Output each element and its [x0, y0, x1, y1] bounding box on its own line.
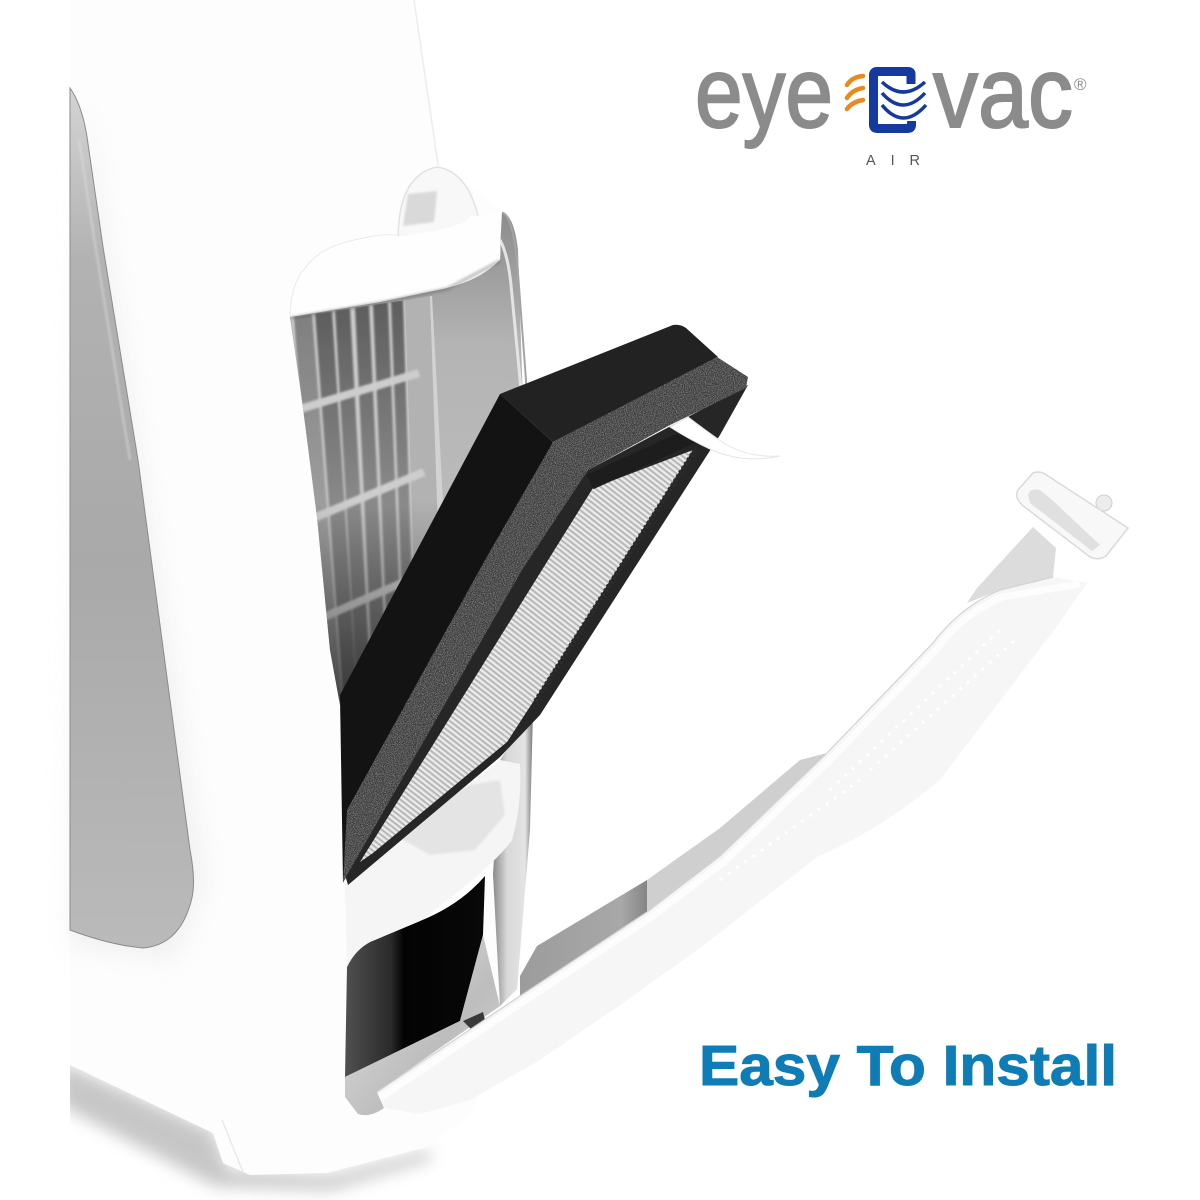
shelf under shadow [291, 261, 500, 318]
headline: Easy To Install: Easy To Install [699, 1034, 1117, 1098]
logo icon: orange air waves [847, 76, 863, 109]
pleated media [360, 450, 693, 862]
white pull tab [670, 417, 780, 459]
shelf outline [290, 235, 400, 317]
registered mark: ® [1074, 75, 1087, 94]
top face [500, 325, 718, 442]
door dimple texture [720, 630, 1015, 880]
HEPA filter cartridge [340, 325, 780, 885]
shelf clip [395, 780, 505, 855]
door edge line [377, 577, 1053, 1092]
bay right rim [503, 213, 533, 710]
side silver window [70, 88, 194, 948]
filter bay: back wall [290, 212, 533, 880]
hinge arm [967, 527, 1056, 603]
hinge slot [1028, 490, 1100, 551]
grille slots [294, 300, 416, 710]
device body [70, 0, 530, 1175]
intake grille [291, 296, 443, 705]
foam gasket top strip [553, 357, 748, 470]
base seam [222, 1120, 243, 1172]
black lower cavity [345, 876, 485, 1077]
door inner band light [647, 753, 827, 912]
hinge pin [1096, 495, 1112, 511]
small latch [463, 1012, 487, 1034]
hinged door [377, 472, 1128, 1114]
door inner band dark [520, 880, 647, 998]
door edge ridge [380, 584, 1080, 1098]
body seam line [414, 0, 438, 165]
grille lighter strip [430, 296, 443, 512]
logo: eyevac Air [695, 37, 1087, 169]
top shelf with dome [290, 167, 500, 318]
logo word: AIR: AIR [866, 153, 920, 169]
window highlight [79, 140, 130, 460]
grille lower shading [318, 516, 433, 705]
door outer panel [377, 577, 1087, 1114]
dome [398, 167, 480, 240]
foam gasket long strip [343, 442, 588, 883]
door hinge head [1017, 472, 1128, 559]
side window glow [70, 100, 205, 960]
gasket shadow [590, 432, 700, 482]
grille backing [291, 296, 432, 592]
logo word: eye: eye [695, 37, 833, 149]
lower shelf [345, 760, 520, 967]
serrated media edge [535, 450, 695, 702]
frame interior [345, 385, 748, 885]
grille right panel [405, 296, 438, 556]
cavity floor [345, 935, 500, 1115]
black side face [340, 394, 553, 883]
shelf [290, 213, 500, 317]
logo word: vac: vac [933, 37, 1073, 149]
floor shadow [60, 1062, 430, 1190]
grille cross bars [300, 373, 424, 617]
lower bay [345, 710, 533, 1115]
logo icon: blue filter [874, 72, 926, 128]
lower right column [493, 710, 533, 1006]
dome recess [403, 191, 437, 226]
